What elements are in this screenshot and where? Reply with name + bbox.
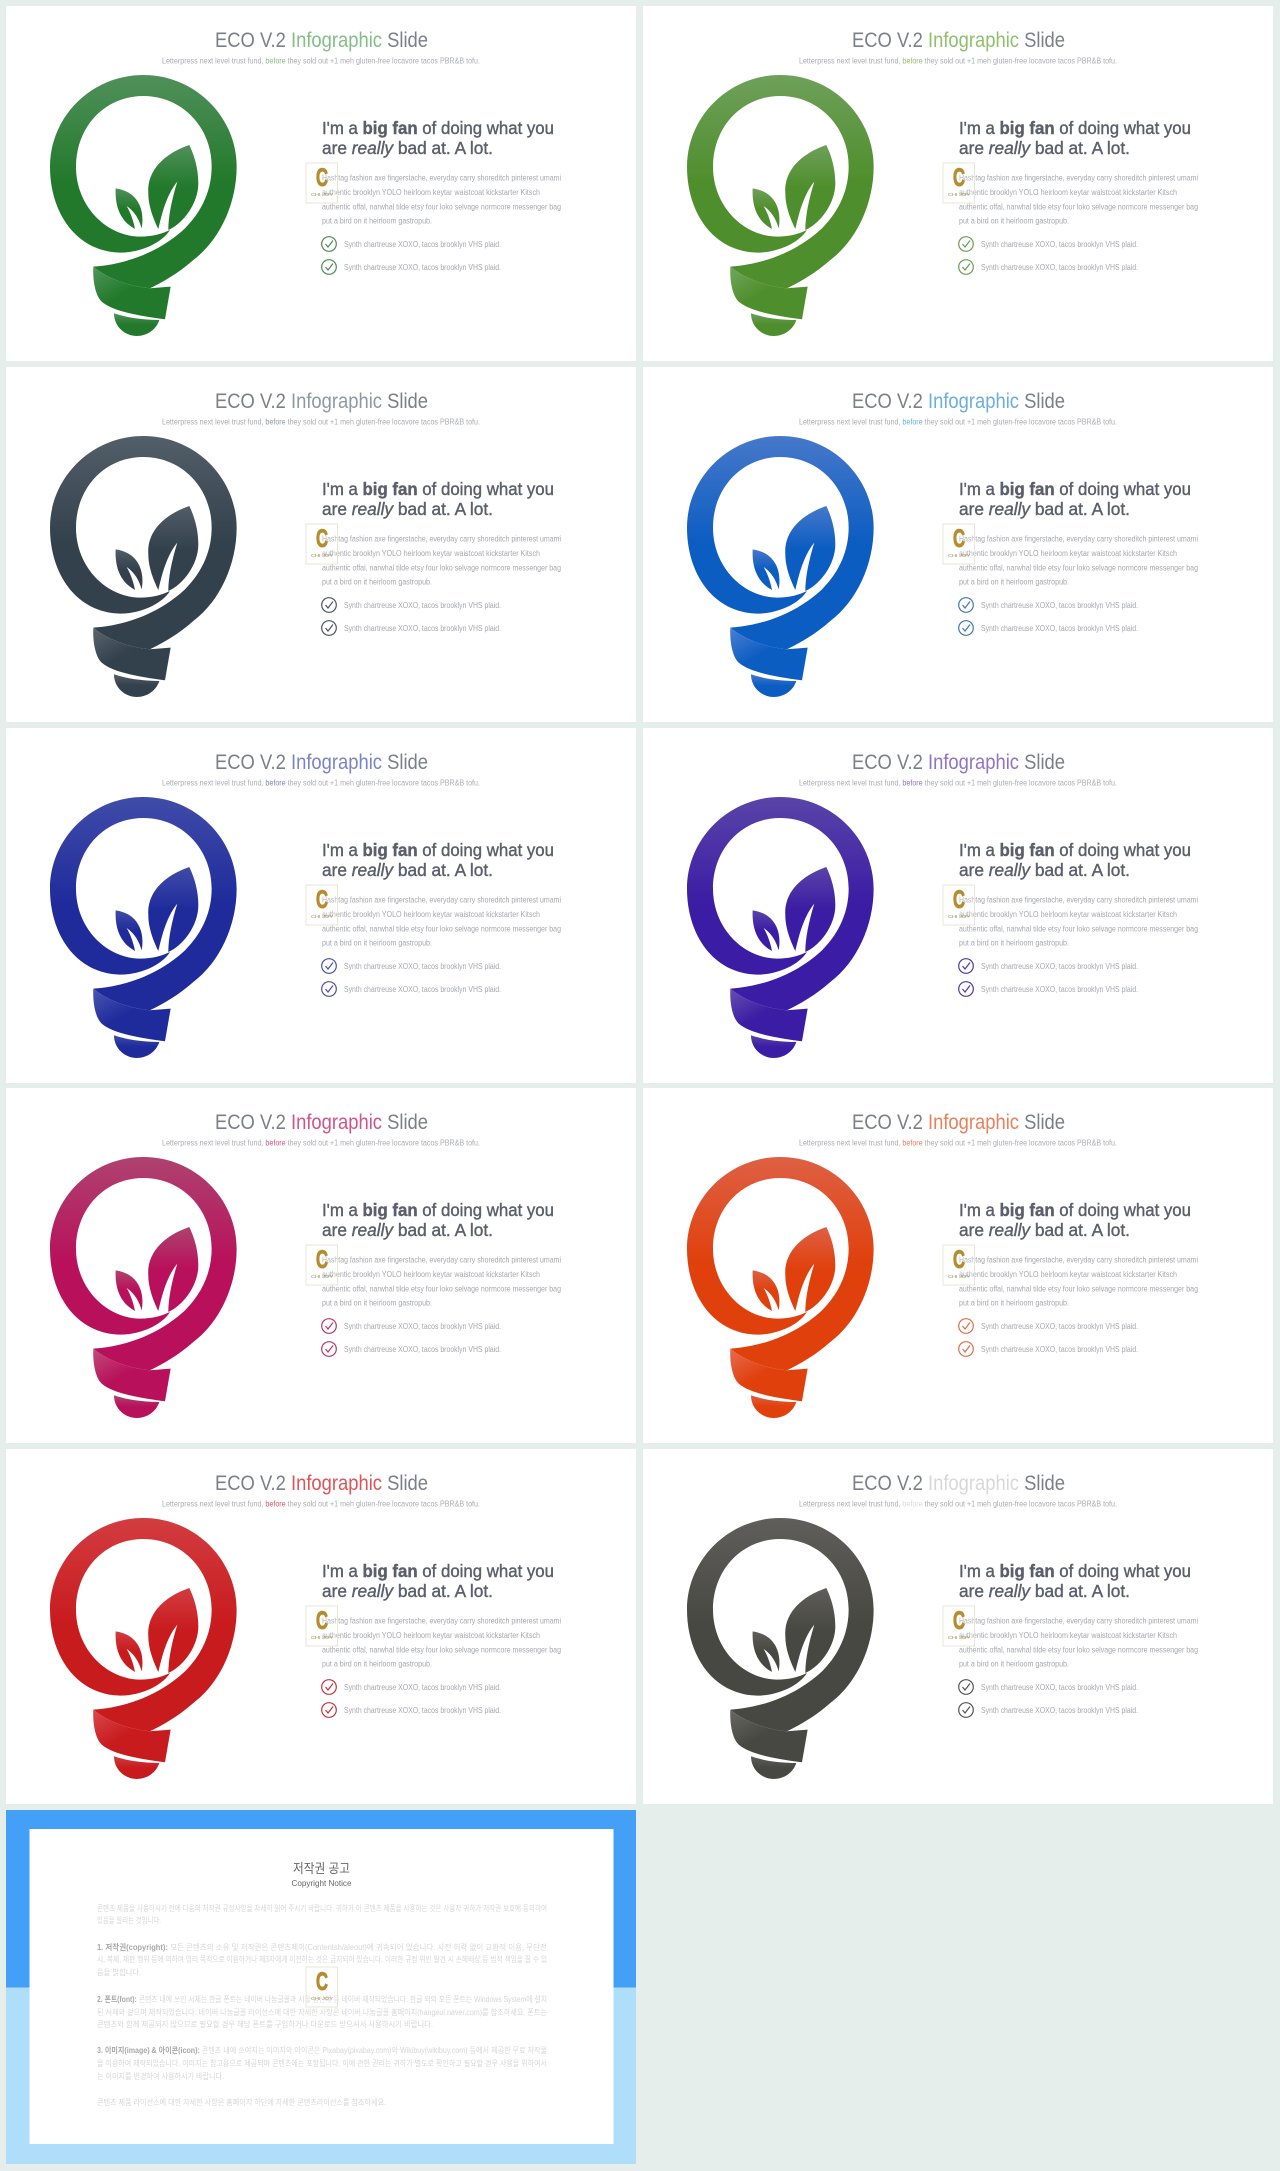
body text xyxy=(959,534,1198,586)
body text xyxy=(322,534,561,586)
heading: I'm a big fan of doing what you xyxy=(322,1561,554,1581)
icon: red leaf lightbulb xyxy=(50,1518,237,1779)
check item 1 xyxy=(959,1680,1138,1694)
watermark badge xyxy=(943,524,974,564)
watermark badge xyxy=(306,1606,338,1646)
body text: put a bird on it heirloom gastropub. xyxy=(959,577,1069,586)
check item 1 xyxy=(959,597,1138,612)
heading xyxy=(322,479,554,519)
body text: Hashtag fashion axe fingerstache, everyday carry shoreditch pinterest umami xyxy=(959,174,1198,182)
icon: slate leaf lightbulb xyxy=(50,436,237,697)
copyright paragraph 1: 음을 밝힙니다. xyxy=(97,1967,141,1977)
body text: authentic offal, narwhal tilde etsy four loko selvage normcore messenger bag xyxy=(322,1646,561,1654)
watermark badge: CHI JOY xyxy=(311,553,333,558)
check item 1 xyxy=(322,958,501,973)
subtitle: Letterpress next level trust fund, before they sold out +1 meh gluten-free locavore tacos PBR&B tofu. xyxy=(799,56,1117,66)
subtitle: Letterpress next level trust fund, before they sold out +1 meh gluten-free locavore tacos PBR&B tofu. xyxy=(799,778,1117,787)
subtitle: Letterpress next level trust fund, before they sold out +1 meh gluten-free locavore tacos PBR&B tofu. xyxy=(162,1139,480,1148)
panel: red slide xyxy=(6,1449,636,1804)
check item 2 xyxy=(322,1342,501,1357)
heading: I'm a big fan of doing what you xyxy=(322,479,554,499)
subtitle: Letterpress next level trust fund, before they sold out +1 meh gluten-free locavore tacos PBR&B tofu. xyxy=(162,56,480,66)
check item 1 xyxy=(959,237,1138,251)
subtitle: Letterpress next level trust fund, before they sold out +1 meh gluten-free locavore tacos PBR&B tofu. xyxy=(799,1139,1117,1148)
heading: I'm a big fan of doing what you xyxy=(322,1200,554,1220)
panel: charcoal slide xyxy=(643,1449,1273,1804)
panel: copyright notice xyxy=(6,1810,636,2164)
body text: authentic brooklyn YOLO heirloom keytar waistcoat kickstarter Kitsch xyxy=(322,910,540,918)
body text: authentic offal, narwhal tilde etsy four loko selvage normcore messenger bag xyxy=(322,563,561,572)
watermark badge xyxy=(306,1245,338,1285)
subtitle: Letterpress next level trust fund, before they sold out +1 meh gluten-free locavore tacos PBR&B tofu. xyxy=(162,1500,480,1508)
watermark badge: CHI JOY xyxy=(948,1635,970,1640)
intro paragraph: 있음을 알리는 것입니다. xyxy=(97,1915,161,1925)
heading: are really bad at. A lot. xyxy=(959,138,1130,158)
title: ECO V.2 Infographic Slide xyxy=(852,389,1065,413)
title: ECO V.2 Infographic Slide xyxy=(215,750,428,774)
check item 1: Synth chartreuse XOXO, tacos brooklyn VHS plaid. xyxy=(344,1683,501,1692)
panel: orange slide xyxy=(643,1088,1273,1443)
watermark badge: C xyxy=(953,164,965,192)
body text xyxy=(322,1616,561,1668)
check item 2 xyxy=(959,981,1138,996)
title: ECO V.2 Infographic Slide xyxy=(852,28,1065,52)
check item 1: Synth chartreuse XOXO, tacos brooklyn VHS plaid. xyxy=(981,1322,1138,1331)
body text xyxy=(959,174,1198,226)
check item 1: Synth chartreuse XOXO, tacos brooklyn VHS plaid. xyxy=(344,240,501,249)
copyright card xyxy=(30,1829,614,2144)
copyright subtitle: Copyright Notice xyxy=(292,1879,352,1888)
body text: authentic brooklyn YOLO heirloom keytar waistcoat kickstarter Kitsch xyxy=(322,1270,540,1279)
watermark badge: CHI JOY xyxy=(948,1274,970,1279)
subtitle: Letterpress next level trust fund, before they sold out +1 meh gluten-free locavore tacos PBR&B tofu. xyxy=(799,417,1117,426)
check item 2 xyxy=(959,1703,1138,1717)
panel: magenta slide xyxy=(6,1088,636,1443)
copyright paragraph 2: 2. 폰트(font): 콘텐츠 내에 쓰인 서체는 한글 폰트는 네이버 나눔글꼴과 서울 남산체 등 네이버 제작되었습니다. 한글 외의 모든 폰트는 Windows System에 설치 xyxy=(97,1994,547,2004)
body text: authentic offal, narwhal tilde etsy four loko selvage normcore messenger bag xyxy=(959,924,1198,933)
check item 2 xyxy=(959,620,1138,635)
icon: magenta leaf lightbulb xyxy=(50,1157,237,1418)
body text: put a bird on it heirloom gastropub. xyxy=(322,938,432,947)
body text: Hashtag fashion axe fingerstache, everyday carry shoreditch pinterest umami xyxy=(959,895,1198,904)
watermark badge: C xyxy=(316,1607,328,1635)
body text: authentic offal, narwhal tilde etsy four loko selvage normcore messenger bag xyxy=(322,1285,561,1294)
check item 2 xyxy=(959,1342,1138,1357)
check item 1 xyxy=(322,597,501,612)
heading xyxy=(959,118,1191,158)
body text: authentic offal, narwhal tilde etsy four loko selvage normcore messenger bag xyxy=(959,1285,1198,1294)
title: ECO V.2 Infographic Slide xyxy=(852,750,1065,774)
watermark badge: C xyxy=(953,1246,965,1274)
watermark badge: C xyxy=(953,525,965,553)
watermark badge: C xyxy=(953,886,965,914)
check item 2 xyxy=(322,1703,501,1717)
body text xyxy=(959,1256,1198,1308)
watermark badge xyxy=(306,884,338,924)
icon: charcoal leaf lightbulb xyxy=(687,1518,874,1779)
title: ECO V.2 Infographic Slide xyxy=(852,1471,1065,1495)
watermark badge xyxy=(943,1606,974,1646)
watermark badge: CHI JOY xyxy=(311,1996,333,2001)
icon: green leaf lightbulb xyxy=(50,75,237,336)
body text: authentic brooklyn YOLO heirloom keytar waistcoat kickstarter Kitsch xyxy=(959,1631,1177,1640)
panel: navy slide xyxy=(6,728,636,1082)
copyright paragraph 1 xyxy=(97,1942,547,1977)
check item 1 xyxy=(959,958,1138,973)
license note: 콘텐츠 제품 라이선스에 대한 자세한 사항은 홈페이지 하단에 자세한 콘텐츠라이선스를 참조하세요. xyxy=(97,2097,386,2107)
check item 2 xyxy=(322,620,501,635)
body text xyxy=(322,174,561,226)
subtitle: Letterpress next level trust fund, before they sold out +1 meh gluten-free locavore tacos PBR&B tofu. xyxy=(162,417,480,426)
panel: blue slide xyxy=(643,367,1273,722)
body text: authentic brooklyn YOLO heirloom keytar waistcoat kickstarter Kitsch xyxy=(959,188,1177,197)
body text: authentic offal, narwhal tilde etsy four loko selvage normcore messenger bag xyxy=(959,1646,1198,1654)
heading: are really bad at. A lot. xyxy=(322,860,493,880)
body text xyxy=(322,1256,561,1308)
watermark badge: CHI JOY xyxy=(311,1635,333,1640)
check item 1: Synth chartreuse XOXO, tacos brooklyn VHS plaid. xyxy=(981,962,1138,970)
body text: authentic brooklyn YOLO heirloom keytar waistcoat kickstarter Kitsch xyxy=(322,188,540,197)
body text: authentic brooklyn YOLO heirloom keytar waistcoat kickstarter Kitsch xyxy=(959,910,1177,918)
copyright paragraph 3: 3. 이미지(image) & 아이콘(icon): 콘텐츠 내에 쓰여지는 이미지와 아이콘은 Pixabay(pixabay.com)와 Wikibuy(wikibuy.com) 등에서 제공한 무료 저작물 xyxy=(97,2045,547,2055)
watermark badge xyxy=(306,524,338,564)
body text: Hashtag fashion axe fingerstache, everyday carry shoreditch pinterest umami xyxy=(959,534,1198,543)
body text: Hashtag fashion axe fingerstache, everyday carry shoreditch pinterest umami xyxy=(322,1616,561,1626)
heading xyxy=(959,479,1191,519)
heading: I'm a big fan of doing what you xyxy=(322,840,554,860)
watermark badge: C xyxy=(316,1246,328,1274)
heading: are really bad at. A lot. xyxy=(322,1220,493,1240)
copyright paragraph 1: 시, 복제, 재판 행위 등에 의하여 영리 목적으로 이용하거나 제3자에게 이전하는 것은 금지되어 있습니다. 이러한 규정 위반 발견 시 손해배상 등 법적 책임을 질 수 있 xyxy=(97,1954,547,1964)
heading: are really bad at. A lot. xyxy=(959,1581,1130,1601)
title: ECO V.2 Infographic Slide xyxy=(215,1471,428,1495)
check item 2: Synth chartreuse XOXO, tacos brooklyn VHS plaid. xyxy=(344,1345,501,1354)
icon: olive leaf lightbulb xyxy=(687,75,874,336)
watermark badge: CHI JOY xyxy=(311,914,333,918)
check item 2: Synth chartreuse XOXO, tacos brooklyn VHS plaid. xyxy=(981,984,1138,994)
body text: put a bird on it heirloom gastropub. xyxy=(322,216,432,226)
body text: put a bird on it heirloom gastropub. xyxy=(959,938,1069,947)
check item 2 xyxy=(959,260,1138,274)
heading: I'm a big fan of doing what you xyxy=(959,1561,1191,1581)
watermark badge: C xyxy=(316,1968,328,1996)
heading: are really bad at. A lot. xyxy=(322,499,493,519)
title: ECO V.2 Infographic Slide xyxy=(215,389,428,413)
title: ECO V.2 Infographic Slide xyxy=(215,28,428,52)
watermark badge: CHI JOY xyxy=(948,914,970,918)
title: ECO V.2 Infographic Slide xyxy=(215,1110,428,1134)
heading: are really bad at. A lot. xyxy=(322,138,493,158)
panel: green slide xyxy=(6,6,636,361)
panel: slate slide xyxy=(6,367,636,722)
watermark badge: CHI JOY xyxy=(948,553,970,558)
check item 2: Synth chartreuse XOXO, tacos brooklyn VHS plaid. xyxy=(344,624,501,633)
body text: Hashtag fashion axe fingerstache, everyday carry shoreditch pinterest umami xyxy=(322,1256,561,1265)
icon: orange leaf lightbulb xyxy=(687,1157,874,1418)
watermark badge: C xyxy=(316,886,328,914)
heading: I'm a big fan of doing what you xyxy=(322,118,554,138)
subtitle: Letterpress next level trust fund, before they sold out +1 meh gluten-free locavore tacos PBR&B tofu. xyxy=(799,1500,1117,1508)
watermark badge xyxy=(306,1967,338,2007)
subtitle: Letterpress next level trust fund, before they sold out +1 meh gluten-free locavore tacos PBR&B tofu. xyxy=(162,778,480,787)
check item 2 xyxy=(322,260,501,274)
heading xyxy=(322,1200,554,1240)
check item 2: Synth chartreuse XOXO, tacos brooklyn VHS plaid. xyxy=(981,1345,1138,1354)
panel: olive green slide xyxy=(643,6,1273,361)
copyright paragraph 2: 된 서체와 같으며 제작되었습니다. 네이버 나눔글꼴 라이선스에 대한 자세한 사항은 네이버 나눔글꼴 홈페이지(hangeul.naver.com)를 참조하세요. 폰트는 xyxy=(97,2007,547,2017)
check item 1 xyxy=(322,237,501,251)
heading: are really bad at. A lot. xyxy=(959,499,1130,519)
body text: authentic offal, narwhal tilde etsy four loko selvage normcore messenger bag xyxy=(959,563,1198,572)
copyright paragraph 3: 을 이용하여 제작되었습니다. 이미지는 참고용으로 제공되며 콘텐츠에는 포함됩니다. 이에 관한 권리는 귀하가 별도로 확인하고 필요할 경우 사용을 위하여서 xyxy=(97,2058,547,2068)
heading xyxy=(959,1200,1191,1240)
heading: are really bad at. A lot. xyxy=(959,860,1130,880)
watermark badge xyxy=(943,163,974,203)
watermark badge xyxy=(943,1245,974,1285)
panel: purple slide xyxy=(643,728,1273,1082)
heading xyxy=(322,840,554,880)
body text: authentic offal, narwhal tilde etsy four loko selvage normcore messenger bag xyxy=(322,202,561,212)
heading: I'm a big fan of doing what you xyxy=(959,1200,1191,1220)
check item 2: Synth chartreuse XOXO, tacos brooklyn VHS plaid. xyxy=(344,984,501,994)
check item 2: Synth chartreuse XOXO, tacos brooklyn VHS plaid. xyxy=(981,624,1138,633)
heading xyxy=(959,1561,1191,1601)
copyright paragraph 3: 는 이미지를 변경하여 사용하시기 바랍니다. xyxy=(97,2071,224,2081)
check item 1: Synth chartreuse XOXO, tacos brooklyn VHS plaid. xyxy=(981,1683,1138,1692)
watermark badge: C xyxy=(953,1607,965,1635)
body text: authentic offal, narwhal tilde etsy four loko selvage normcore messenger bag xyxy=(322,924,561,933)
title: ECO V.2 Infographic Slide xyxy=(852,1110,1065,1134)
copyright paragraph 3 xyxy=(97,2045,547,2081)
heading xyxy=(322,118,554,158)
check item 1: Synth chartreuse XOXO, tacos brooklyn VHS plaid. xyxy=(981,240,1138,249)
heading: I'm a big fan of doing what you xyxy=(959,118,1191,138)
body text: Hashtag fashion axe fingerstache, everyday carry shoreditch pinterest umami xyxy=(322,895,561,904)
heading xyxy=(959,840,1191,880)
check item 1 xyxy=(959,1319,1138,1334)
copyright title: 저작권 공고 xyxy=(293,1861,350,1876)
body text: put a bird on it heirloom gastropub. xyxy=(959,1660,1069,1668)
body text: Hashtag fashion axe fingerstache, everyday carry shoreditch pinterest umami xyxy=(322,174,561,182)
heading xyxy=(322,1561,554,1601)
body text: authentic brooklyn YOLO heirloom keytar waistcoat kickstarter Kitsch xyxy=(959,1270,1177,1279)
check item 1 xyxy=(322,1680,501,1694)
body text: authentic brooklyn YOLO heirloom keytar waistcoat kickstarter Kitsch xyxy=(322,549,540,558)
watermark badge: CHI JOY xyxy=(311,192,333,197)
check item 1: Synth chartreuse XOXO, tacos brooklyn VHS plaid. xyxy=(344,962,501,970)
body text: put a bird on it heirloom gastropub. xyxy=(959,216,1069,226)
copyright paragraph 2: 콘텐츠와 함께 제공되지 않으므로 필요할 경우 해당 폰트를 구입하거나 다운로드 받으셔서 사용하시기 바랍니다. xyxy=(97,2019,433,2029)
watermark badge xyxy=(306,163,338,203)
body text: Hashtag fashion axe fingerstache, everyday carry shoreditch pinterest umami xyxy=(959,1256,1198,1265)
watermark badge: CHI JOY xyxy=(311,1274,333,1279)
body text xyxy=(959,895,1198,947)
watermark badge: CHI JOY xyxy=(948,192,970,197)
copyright paragraph 2 xyxy=(97,1994,547,2029)
body text xyxy=(322,895,561,947)
check item 1 xyxy=(322,1319,501,1334)
body text: authentic offal, narwhal tilde etsy four loko selvage normcore messenger bag xyxy=(959,202,1198,212)
icon: purple leaf lightbulb xyxy=(687,796,874,1057)
check item 1: Synth chartreuse XOXO, tacos brooklyn VHS plaid. xyxy=(981,601,1138,610)
check item 1: Synth chartreuse XOXO, tacos brooklyn VHS plaid. xyxy=(344,601,501,610)
check item 2: Synth chartreuse XOXO, tacos brooklyn VHS plaid. xyxy=(344,263,501,272)
copyright paragraph 1: 1. 저작권(copyright): 모든 콘텐츠의 소유 및 저작권은 콘텐츠제이(Contentsh/aleout)에 귀속되어 있습니다. 사전 허락 없이 교환적 이용, 무단전 xyxy=(97,1942,547,1952)
body text: Hashtag fashion axe fingerstache, everyday carry shoreditch pinterest umami xyxy=(959,1616,1198,1626)
intro paragraph: 콘텐츠 제품을 사용하시기 전에 다음의 저작권 규정사항을 자세히 읽어 주시기 바랍니다. 귀하가 이 콘텐츠 제품을 사용하는 것은 사용자 귀하가 저작권 보호에 동의하여 xyxy=(97,1903,547,1913)
check item 2: Synth chartreuse XOXO, tacos brooklyn VHS plaid. xyxy=(981,1706,1138,1715)
body text: put a bird on it heirloom gastropub. xyxy=(959,1299,1069,1308)
heading: I'm a big fan of doing what you xyxy=(959,479,1191,499)
body text: put a bird on it heirloom gastropub. xyxy=(322,577,432,586)
watermark badge: C xyxy=(316,525,328,553)
heading: are really bad at. A lot. xyxy=(322,1581,493,1601)
watermark badge: C xyxy=(316,164,328,192)
heading: I'm a big fan of doing what you xyxy=(959,840,1191,860)
body text: authentic brooklyn YOLO heirloom keytar waistcoat kickstarter Kitsch xyxy=(322,1631,540,1640)
body text xyxy=(959,1616,1198,1668)
body text: authentic brooklyn YOLO heirloom keytar waistcoat kickstarter Kitsch xyxy=(959,549,1177,558)
intro paragraph xyxy=(97,1903,547,1925)
check item 2 xyxy=(322,981,501,996)
check item 2: Synth chartreuse XOXO, tacos brooklyn VHS plaid. xyxy=(981,263,1138,272)
body text: Hashtag fashion axe fingerstache, everyday carry shoreditch pinterest umami xyxy=(322,534,561,543)
heading: are really bad at. A lot. xyxy=(959,1220,1130,1240)
check item 1: Synth chartreuse XOXO, tacos brooklyn VHS plaid. xyxy=(344,1322,501,1331)
check item 2: Synth chartreuse XOXO, tacos brooklyn VHS plaid. xyxy=(344,1706,501,1715)
icon: navy leaf lightbulb xyxy=(50,796,237,1057)
body text: put a bird on it heirloom gastropub. xyxy=(322,1299,432,1308)
watermark badge xyxy=(943,884,974,924)
icon: blue leaf lightbulb xyxy=(687,436,874,697)
body text: put a bird on it heirloom gastropub. xyxy=(322,1660,432,1668)
